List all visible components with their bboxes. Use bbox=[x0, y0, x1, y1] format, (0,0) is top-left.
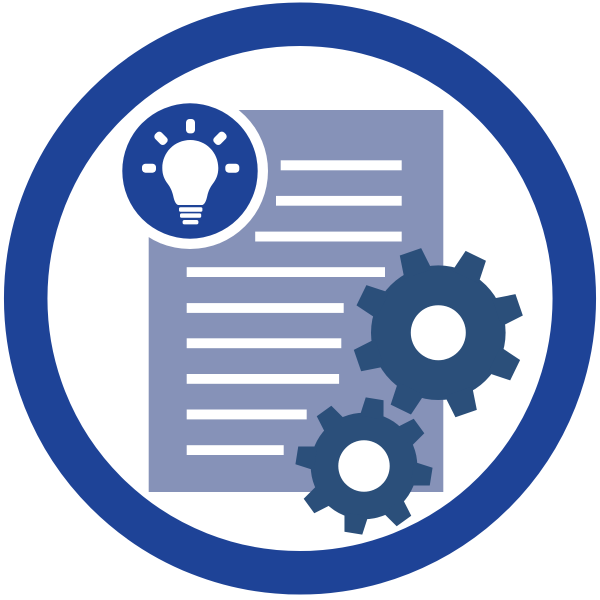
text lines bbox=[187, 160, 402, 455]
badge white border bbox=[112, 93, 268, 249]
icon: lightbulb badge bbox=[112, 93, 268, 249]
document sheet bbox=[149, 110, 443, 492]
bulb base stripes bbox=[179, 207, 202, 224]
panel: document page bbox=[149, 110, 443, 492]
icon: small gear bbox=[295, 397, 433, 535]
bulb glass bbox=[162, 140, 218, 205]
badge blue disc bbox=[122, 103, 258, 239]
icon: large gear bbox=[353, 247, 524, 418]
bulb rays bbox=[142, 119, 239, 173]
